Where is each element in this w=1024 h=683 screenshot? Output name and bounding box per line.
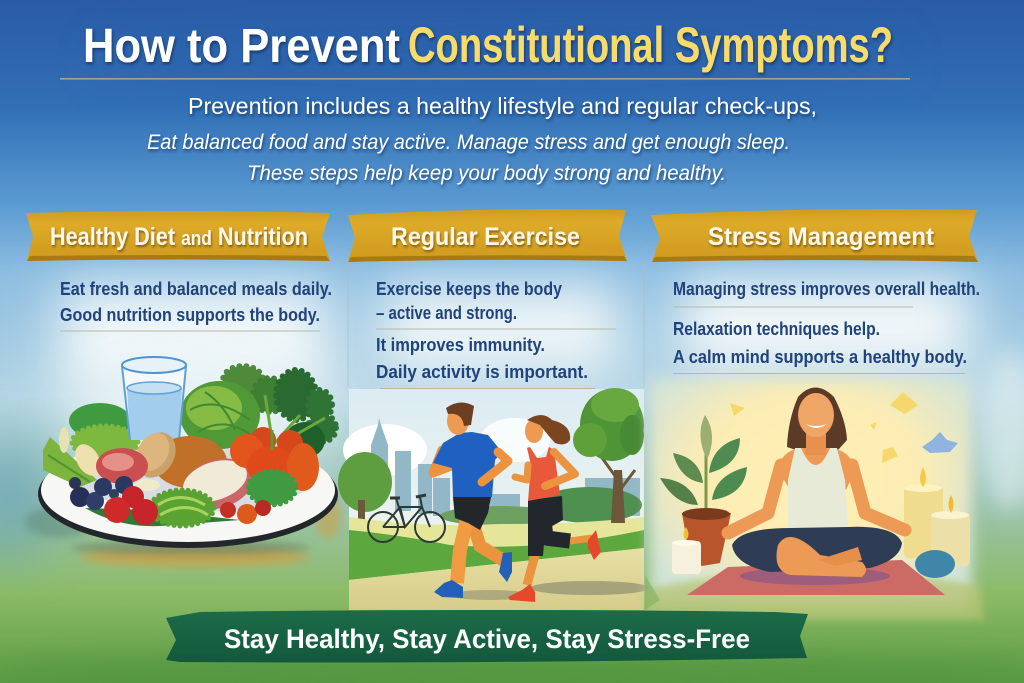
text: exercise — [376, 279, 616, 389]
title: How to Prevent — [83, 20, 400, 73]
banner — [166, 610, 808, 662]
text: stress: Relaxation techniques help. — [673, 319, 880, 339]
candles — [672, 467, 970, 578]
text: stress: A calm mind supports a healthy body. — [673, 347, 967, 367]
berries — [69, 476, 271, 525]
text: stress: Managing stress improves overall health. — [673, 279, 980, 299]
ribbon: exercise heading — [348, 209, 627, 262]
herbs — [85, 471, 296, 526]
text: diet: Eat fresh and balanced meals daily. — [60, 279, 332, 299]
plate — [38, 438, 338, 548]
tree — [573, 388, 644, 523]
text: diet — [60, 279, 332, 332]
yoga mat — [687, 560, 945, 595]
text: exercise: Exercise keeps the body — [376, 279, 562, 299]
title — [83, 17, 893, 73]
warm background — [645, 378, 985, 620]
text: stress — [673, 279, 980, 374]
bread and meat — [96, 425, 261, 518]
meditating woman — [728, 388, 905, 577]
intro text — [147, 93, 817, 185]
tomatoes — [230, 427, 319, 491]
intro text: These steps help keep your body strong and healthy. — [247, 162, 726, 185]
illustration: food plate — [25, 357, 341, 567]
ribbon: stress heading: Stress Management — [708, 223, 935, 251]
woman runner — [508, 415, 601, 602]
back greens — [43, 403, 138, 487]
text: exercise: – active and strong. — [376, 303, 517, 323]
illustration: joggers in park — [338, 388, 650, 610]
ribbon: exercise heading: Regular Exercise — [391, 223, 580, 251]
text: exercise: Daily activity is important. — [376, 362, 588, 382]
text: exercise: It improves immunity. — [376, 335, 545, 355]
banner: Stay Healthy, Stay Active, Stay Stress-Free — [224, 624, 750, 654]
intro text: Eat balanced food and stay active. Manage stress and get enough sleep. — [147, 131, 790, 154]
text: diet: Good nutrition supports the body. — [60, 305, 320, 325]
cabbage — [180, 381, 260, 449]
plant — [660, 415, 747, 566]
ribbon: healthy diet heading — [26, 211, 330, 261]
park scene — [338, 388, 650, 610]
man runner — [433, 402, 512, 598]
ribbon: stress heading — [651, 209, 978, 262]
kale — [223, 366, 336, 458]
intro text: Prevention includes a healthy lifestyle and regular check-ups, — [188, 93, 817, 119]
panel: regular exercise — [338, 209, 650, 610]
water glass — [122, 357, 186, 440]
floating leaves — [730, 392, 918, 463]
lotus — [922, 432, 958, 453]
plate shadow — [25, 491, 341, 567]
illustration: meditation — [645, 378, 985, 620]
bicycle — [368, 495, 445, 542]
panel: stress management — [645, 209, 985, 620]
panel: healthy diet — [25, 211, 341, 567]
ribbon: healthy diet heading: Healthy Diet and Nutrition — [50, 223, 308, 251]
